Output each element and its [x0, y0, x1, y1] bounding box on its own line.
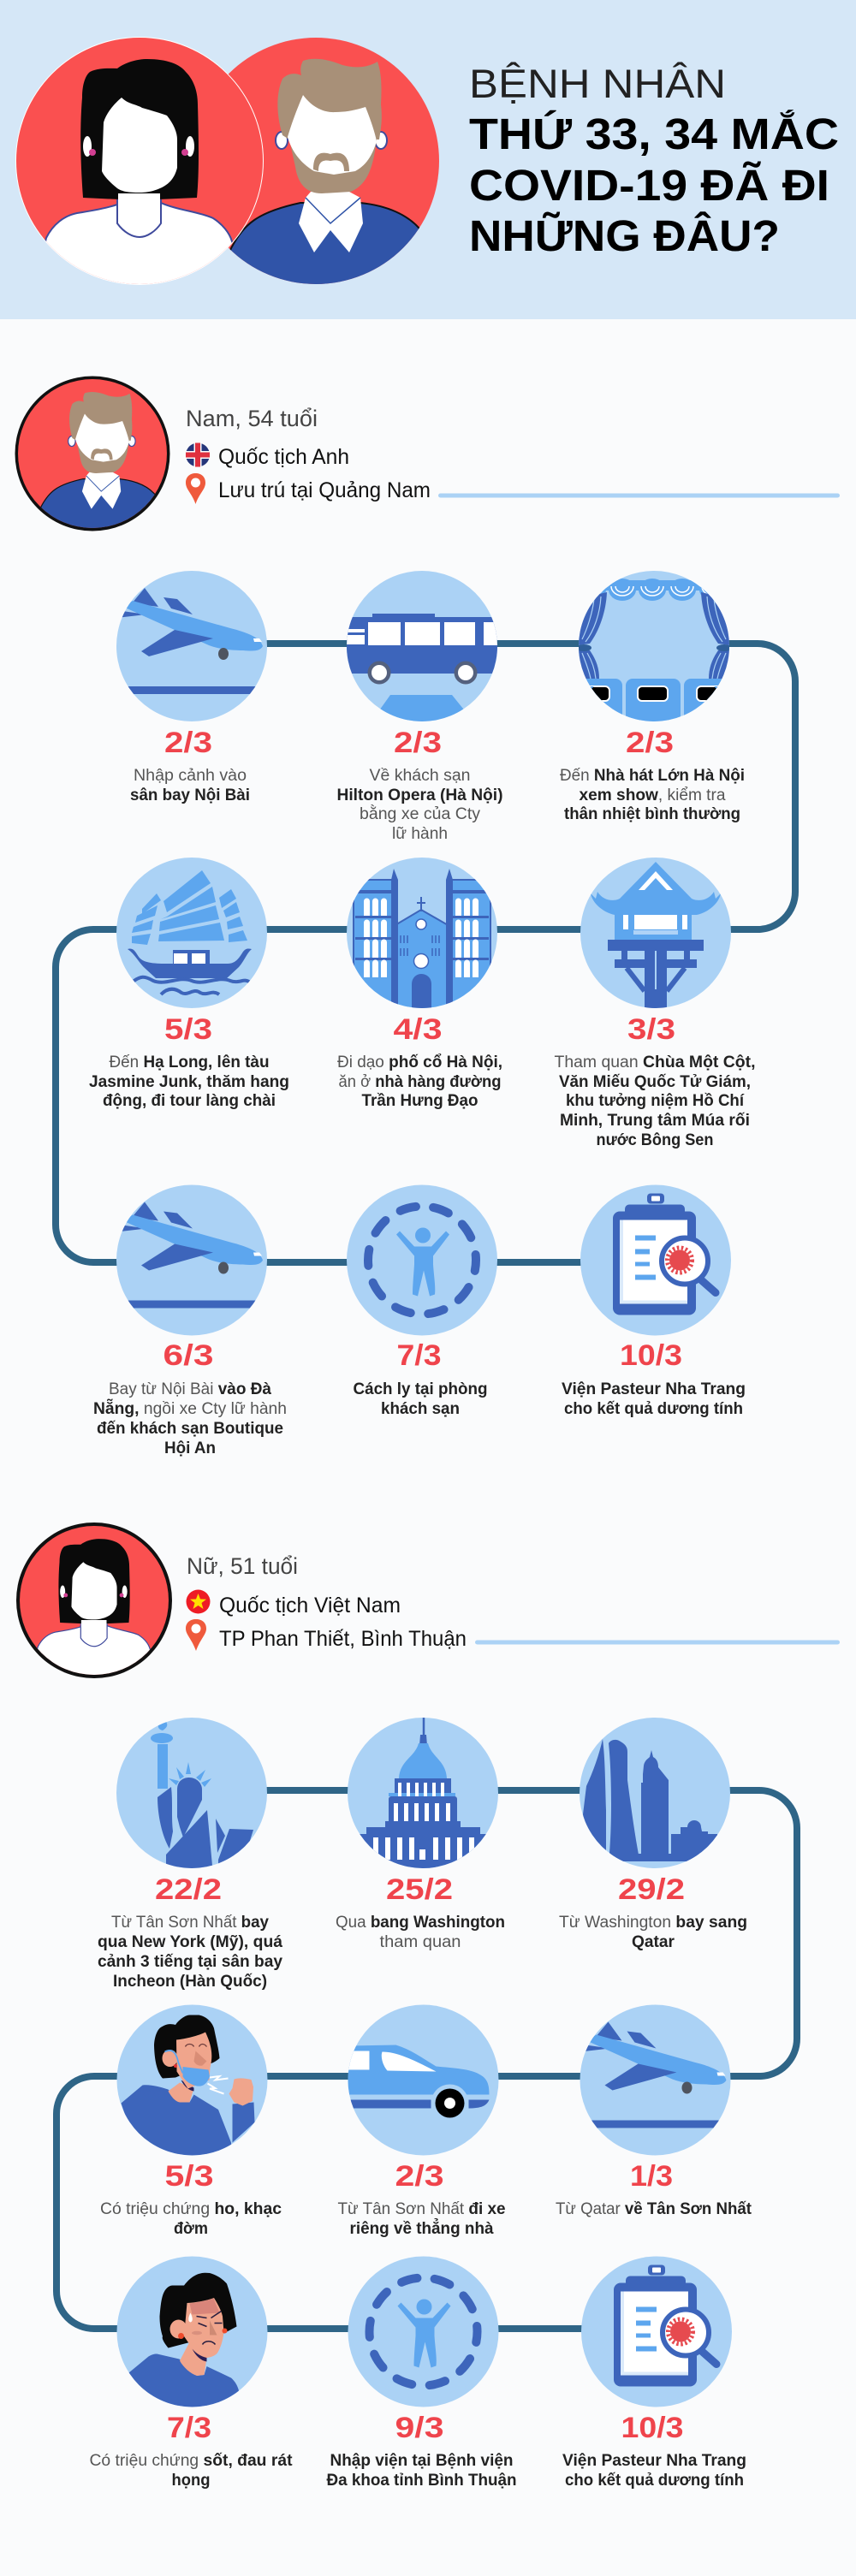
icon: location pin	[186, 473, 205, 504]
icon: theatre	[575, 571, 732, 730]
description: Jasmine Junk, thăm hang	[89, 1073, 289, 1091]
icon: statue of liberty	[116, 1718, 267, 1870]
date: 22/2	[155, 1873, 222, 1906]
icon: woman with fever	[116, 2256, 267, 2413]
description: Từ Washington bay sang	[559, 1914, 747, 1932]
description: Qua bang Washington	[336, 1914, 505, 1932]
residence: TP Phan Thiết, Bình Thuận	[219, 1627, 467, 1651]
description: Đến Hạ Long, lên tàu	[110, 1054, 269, 1071]
description	[89, 1054, 289, 1110]
description: xem show, kiểm tra	[579, 786, 726, 804]
date: 2/3	[394, 727, 442, 759]
description: Qatar	[632, 1933, 675, 1951]
patient profile: woman	[16, 1522, 840, 1679]
step: 6/3 flight to Da Nang	[93, 1184, 287, 1457]
description: Cách ly tại phòng	[353, 1380, 488, 1398]
icon: one pillar pagoda	[580, 858, 731, 1011]
title: COVID-19 ĐÃ ĐI	[469, 160, 829, 210]
icon: bus	[347, 571, 497, 723]
step: 2/3 opera house	[560, 571, 745, 823]
description	[337, 2200, 505, 2238]
step: 5/3 cough symptoms	[100, 2004, 282, 2238]
description: Có triệu chứng ho, khạc	[100, 2200, 282, 2218]
description: ăn ở nhà hàng đường	[339, 1073, 502, 1091]
patient profile: man	[15, 377, 840, 532]
description: họng	[171, 2472, 211, 2490]
description: bằng xe của Cty	[360, 804, 481, 823]
description	[89, 2452, 293, 2490]
icon: quarantine person	[348, 2256, 498, 2407]
description: Về khách sạn	[370, 767, 471, 785]
description: Hội An	[164, 1439, 216, 1457]
icon: UK flag	[186, 443, 210, 467]
description: cho kết quả dương tính	[564, 1400, 743, 1418]
description	[559, 1914, 747, 1951]
date: 3/3	[627, 1013, 675, 1046]
date: 6/3	[163, 1339, 214, 1372]
date: 2/3	[626, 727, 674, 759]
age: Nam, 54 tuổi	[186, 406, 318, 431]
title: THỨ 33, 34 MẮC	[469, 109, 839, 158]
description: Nhập cảnh vào	[134, 767, 247, 785]
step: 22/2 New York	[98, 1718, 282, 1991]
description: riêng về thẳng nhà	[349, 2219, 494, 2238]
step: 10/3 positive result	[562, 1184, 746, 1418]
description: Hilton Opera (Hà Nội)	[337, 786, 503, 804]
date: 2/3	[164, 727, 212, 759]
date: 10/3	[620, 1339, 682, 1372]
description: động, đi tour làng chài	[103, 1092, 276, 1110]
avatar: woman	[16, 1522, 172, 1679]
age: Nữ, 51 tuổi	[187, 1553, 298, 1579]
timeline path: woman	[56, 1790, 797, 2329]
step: 3/3 sightseeing	[555, 858, 755, 1149]
description: Viện Pasteur Nha Trang	[562, 2452, 746, 2470]
description: Từ Qatar về Tân Sơn Nhất	[556, 2200, 752, 2218]
description: Đến Nhà hát Lớn Hà Nội	[560, 767, 745, 785]
description	[130, 767, 250, 804]
icon: coughing woman	[116, 2004, 267, 2162]
nationality: Quốc tịch Việt Nam	[219, 1594, 401, 1617]
date: 2/3	[395, 2160, 443, 2193]
description: lữ hành	[392, 825, 448, 843]
icon: quarantine person	[347, 1184, 497, 1335]
description: Từ Tân Sơn Nhất bay	[111, 1914, 269, 1932]
date: 5/3	[164, 1013, 212, 1046]
step: 9/3 hospital	[327, 2256, 517, 2490]
woman portrait	[15, 37, 264, 291]
title: NHỮNG ĐÂU?	[469, 211, 780, 260]
description: Bay từ Nội Bài vào Đà	[109, 1380, 271, 1398]
date: 7/3	[167, 2412, 211, 2444]
nationality: Quốc tịch Anh	[218, 445, 349, 469]
icon: junk boat	[116, 858, 267, 1008]
description: Trần Hưng Đạo	[361, 1092, 478, 1110]
man portrait	[193, 38, 445, 291]
icon: plane	[116, 571, 267, 721]
description: Viện Pasteur Nha Trang	[562, 1380, 746, 1398]
step: 29/2 Qatar	[559, 1718, 747, 1951]
description	[353, 1380, 488, 1418]
description	[337, 1054, 502, 1110]
description: khách sạn	[381, 1400, 460, 1418]
description: Incheon (Hàn Quốc)	[113, 1973, 267, 1991]
avatar: man	[15, 377, 170, 532]
description	[562, 2452, 746, 2490]
description: cho kết quả dương tính	[565, 2472, 744, 2490]
step: 25/2 Washington	[336, 1716, 505, 1951]
step: 7/3 fever symptoms	[89, 2256, 293, 2490]
icon: location pin	[186, 1619, 206, 1651]
title	[469, 61, 839, 260]
description: Đa khoa tỉnh Bình Thuận	[327, 2472, 517, 2490]
icon: cathedral	[347, 858, 497, 1010]
date: 5/3	[164, 2160, 214, 2193]
step: 2/3 drive home	[337, 2004, 505, 2238]
icon: plane	[116, 1184, 267, 1335]
header banner	[0, 0, 856, 319]
date: 25/2	[386, 1873, 453, 1906]
description	[100, 2200, 282, 2238]
description: đến khách sạn Boutique	[97, 1420, 283, 1438]
icon: clipboard and virus	[581, 2256, 732, 2407]
description: Minh, Trung tâm Múa rối	[560, 1112, 750, 1130]
date: 1/3	[630, 2160, 673, 2193]
description: đờm	[174, 2220, 208, 2238]
icon: skyline	[580, 1718, 730, 1868]
description	[336, 1914, 505, 1951]
description: khu tưởng niệm Hồ Chí	[566, 1092, 745, 1110]
icon: capitol	[348, 1716, 498, 1870]
description: Văn Miếu Quốc Tử Giám,	[559, 1073, 751, 1091]
description: Nẵng, ngồi xe Cty lữ hành	[93, 1398, 287, 1418]
icon: car	[346, 2004, 498, 2155]
description	[337, 767, 503, 843]
step: 2/3 hotel	[337, 571, 503, 843]
description: cảnh 3 tiếng tại sân bay	[98, 1953, 282, 1971]
description: tham quan	[380, 1933, 461, 1951]
step: 5/3 Ha Long	[89, 858, 289, 1110]
date: 10/3	[621, 2412, 683, 2444]
description: thân nhiệt bình thường	[564, 805, 740, 823]
step: 10/3 positive result	[562, 2256, 746, 2490]
date: 4/3	[394, 1013, 442, 1046]
description: qua New York (Mỹ), quá	[98, 1933, 282, 1951]
step: 1/3 return flight	[556, 2004, 752, 2218]
description: Nhập viện tại Bệnh viện	[330, 2452, 514, 2470]
residence: Lưu trú tại Quảng Nam	[218, 478, 431, 502]
description: Tham quan Chùa Một Cột,	[555, 1054, 755, 1071]
description	[562, 1380, 746, 1418]
date: 7/3	[397, 1339, 442, 1372]
description	[98, 1914, 282, 1991]
icon: Vietnam flag	[187, 1590, 211, 1614]
timeline path: man	[56, 644, 795, 1262]
description: nước Bông Sen	[596, 1131, 714, 1149]
description: Đi dạo phố cổ Hà Nội,	[337, 1054, 502, 1071]
description	[327, 2452, 517, 2490]
description: Có triệu chứng sốt, đau rát	[89, 2452, 293, 2470]
date: 9/3	[395, 2412, 443, 2444]
description	[555, 1054, 755, 1149]
title: BỆNH NHÂN	[469, 61, 726, 106]
description: Từ Tân Sơn Nhất đi xe	[337, 2200, 505, 2218]
description	[560, 767, 745, 823]
icon: clipboard and virus	[580, 1184, 731, 1335]
icon: plane	[580, 2004, 731, 2155]
step: 2/3 airport	[116, 571, 267, 804]
step: 4/3 old quarter	[337, 858, 502, 1110]
date: 29/2	[618, 1873, 685, 1906]
description	[93, 1380, 287, 1457]
step: 7/3 quarantine	[347, 1184, 497, 1418]
description: sân bay Nội Bài	[130, 786, 250, 804]
